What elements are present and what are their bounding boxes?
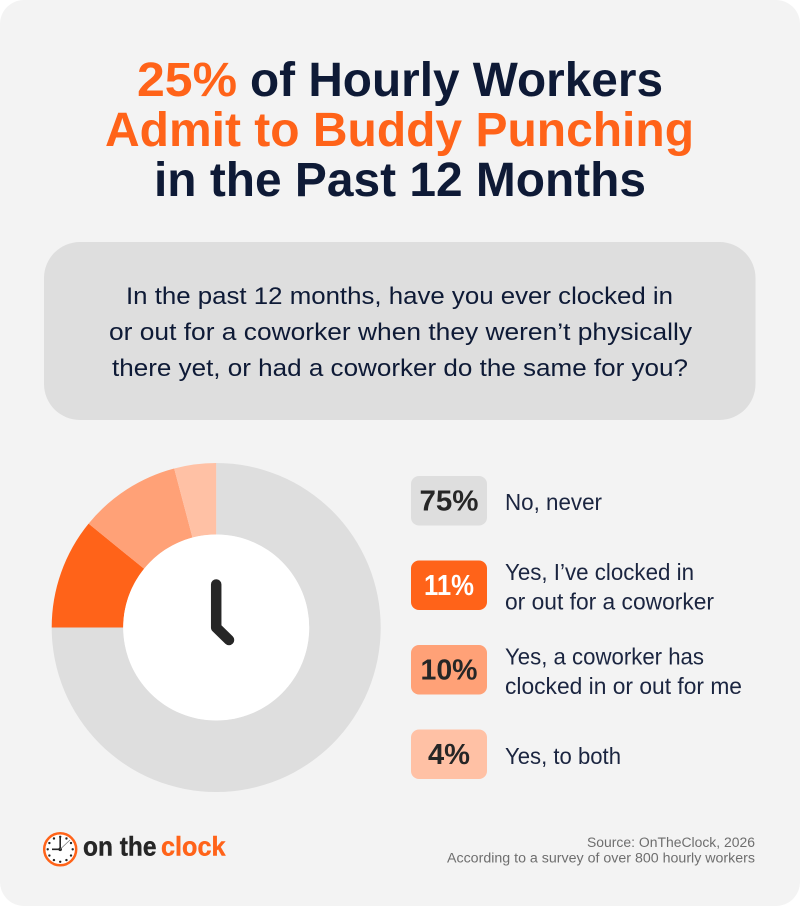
- legend: 75%: No, never: [505, 489, 602, 515]
- segment: 11% clocked in for a coworker: [52, 524, 144, 628]
- logo: on the clock: clock: [161, 832, 226, 862]
- legend: 4%: [411, 730, 621, 779]
- segment: 10% coworker clocked in for me: [89, 468, 192, 569]
- legend: 10%: 10%: [420, 654, 478, 686]
- legend: 75%: 75%: [420, 486, 478, 518]
- source note: According to a survey of over 800 hourly workers: [447, 850, 755, 866]
- segment: 75% no, never: [52, 463, 381, 792]
- question text: there yet, or had a coworker do the same for you?: [112, 355, 688, 382]
- title: [105, 54, 694, 207]
- segment: 4% both: [174, 463, 216, 538]
- title: in the Past 12 Months: [154, 154, 646, 207]
- source note: Source: OnTheClock, 2026: [587, 835, 755, 850]
- legend: 11%: [411, 559, 714, 614]
- panel: survey question: [44, 242, 756, 420]
- icon: clock: [44, 833, 76, 865]
- legend: 10%: clocked in or out for me: [505, 673, 742, 699]
- title: 25%: [137, 54, 237, 107]
- source note: [447, 835, 755, 866]
- logo: on the clock: [44, 832, 226, 865]
- donut centre: [123, 534, 309, 720]
- title: Admit to Buddy Punching: [105, 104, 694, 157]
- title: of Hourly Workers: [250, 54, 663, 107]
- legend: 10%: Yes, a coworker has: [505, 644, 704, 670]
- legend: 4%: 4%: [428, 739, 470, 771]
- legend: 10%: [411, 644, 742, 699]
- question text: or out for a coworker when they weren’t physically: [109, 319, 693, 346]
- legend: 11%: 11%: [424, 570, 474, 602]
- question text: [109, 283, 693, 382]
- legend: 4%: Yes, to both: [505, 743, 621, 769]
- icon: clock hands: [216, 584, 229, 640]
- legend: 11%: or out for a coworker: [505, 588, 714, 614]
- logo: on the clock: on the: [83, 832, 156, 862]
- donut chart: [52, 463, 381, 792]
- legend: 75%: [411, 476, 602, 526]
- legend: 11%: Yes, I’ve clocked in: [505, 559, 694, 585]
- question text: In the past 12 months, have you ever clocked in: [126, 283, 673, 310]
